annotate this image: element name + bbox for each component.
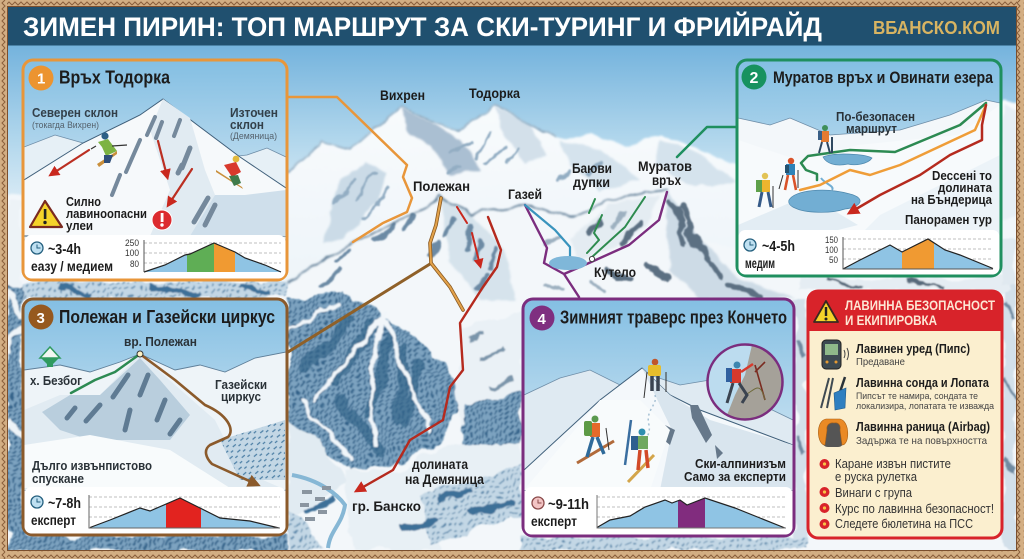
number badge 4: 4 <box>538 311 546 328</box>
duration: ~9-11h <box>548 496 589 513</box>
number badge 4 <box>530 306 554 330</box>
item: airbag: Задържа те на повърхността <box>856 435 987 447</box>
panel 4: winter traverse via Koncheto <box>523 299 794 536</box>
difficulty: медим <box>745 255 775 271</box>
route: Gazey blue <box>525 205 570 257</box>
label: long descent: Дълго извънпистово <box>32 458 152 473</box>
item: probe and shovel: Лавинна сонда и Лопата <box>856 375 990 390</box>
climbers <box>577 359 666 482</box>
peak marker <box>137 351 143 357</box>
safety header: ЛАВИННА БЕЗОПАСНОСТ <box>845 297 995 313</box>
item: probe and shovel: Пипсът те намира, сондата те <box>856 391 978 402</box>
inset: rock climber circle <box>708 344 785 420</box>
elevation chart 2 <box>825 235 993 269</box>
map labels: Баюви <box>572 160 612 176</box>
route lines panel 3 <box>71 354 256 484</box>
label: north slope: Северен склон <box>32 105 118 120</box>
label: Polezhan peak: вр. Полежан <box>124 334 197 349</box>
safety tips list: е руска рулетка <box>835 470 917 484</box>
map labels: връх <box>652 172 681 188</box>
label: avalanche gullies: Силно <box>66 194 101 209</box>
safety tips list: Следете бюлетина на ПСС <box>835 517 973 531</box>
map labels: на Демяница <box>405 471 484 487</box>
label: panoramic tour: Панорамен тур <box>905 212 992 227</box>
map labels: дупки <box>573 174 610 190</box>
panel 1: Vrah Todorka <box>23 60 287 280</box>
map labels: гр. Банско <box>352 498 421 514</box>
label: safer route <box>836 109 915 136</box>
icon: probe and shovel <box>821 377 846 410</box>
icon: clock <box>532 497 544 509</box>
site name: ВБАНСКО.КОМ <box>873 18 1000 38</box>
lakes <box>789 154 872 212</box>
duration: ~3-4h <box>48 241 81 258</box>
label: descent: долината <box>938 180 993 195</box>
label: Gazey cirque: Газейски <box>215 377 267 392</box>
label: ski alpinism: Само за експерти <box>684 469 786 484</box>
short avalanche arrows <box>457 207 480 265</box>
forest fan <box>8 238 1016 550</box>
label: Gazey cirque <box>215 377 267 404</box>
label: long descent: спускане <box>32 471 84 486</box>
stats strip 3 <box>24 487 286 534</box>
hikers <box>756 125 832 208</box>
difficulty: еазу / медием <box>31 258 113 274</box>
frame 3 <box>23 299 287 535</box>
icon: clock <box>31 242 43 254</box>
route lines on main map <box>288 97 736 490</box>
item: airbag: Лавинна раница (Airbag) <box>856 419 990 434</box>
map labels: Газей <box>508 186 542 202</box>
route: Polezhan orange <box>430 198 463 310</box>
number badge 2: 2 <box>750 70 758 87</box>
heading 3: Полежан и Газейски циркус <box>59 307 275 327</box>
label: descent <box>911 168 993 207</box>
safety tips list: Курс по лавинна безопасност! <box>835 502 994 516</box>
route: Demyanitsa red <box>358 217 501 490</box>
elevation chart 1: 100 <box>125 248 139 258</box>
safety header: И ЕКИПИРОВКА <box>845 312 937 328</box>
label: avalanche gullies: улеи <box>66 218 93 233</box>
label: ski alpinism <box>684 456 786 484</box>
frame 2 <box>737 60 1001 276</box>
route lines panel 2 <box>800 103 986 212</box>
number badge 2 <box>742 64 766 90</box>
icon: beacon <box>822 340 848 369</box>
header bar <box>8 7 1016 46</box>
label: ski alpinism: Ски-алпинизъм <box>695 456 786 471</box>
connector: panel 3 <box>288 264 430 352</box>
panel 3: Polezhan and Gazey cirque <box>23 299 287 535</box>
elevation chart 1: 80 <box>130 259 139 269</box>
icon: warning triangle <box>814 301 838 322</box>
safety header <box>808 291 1002 331</box>
number badge 3: 3 <box>36 310 45 327</box>
icon: clock <box>744 239 756 251</box>
icon: clock <box>31 496 43 508</box>
panel: avalanche safety and equipment <box>808 291 1002 538</box>
item: probe and shovel: локализира, лопатата те изважда <box>856 401 995 412</box>
front massif <box>0 190 1024 559</box>
item: airbag <box>818 419 990 447</box>
icon: airbag backpack <box>818 419 848 447</box>
elevation chart 2: 100 <box>825 245 838 255</box>
red slope arrows <box>52 141 192 204</box>
number badge 3 <box>28 304 54 330</box>
lake and hut point <box>549 256 595 270</box>
stats strip 4 <box>524 487 792 534</box>
icon: red alert <box>152 210 172 230</box>
duration: ~4-5h <box>762 238 795 255</box>
item: probe and shovel <box>821 375 995 412</box>
label: descent: на Бъндерица <box>911 192 993 207</box>
stats strip 1 <box>24 235 286 278</box>
frame 4 <box>523 299 794 536</box>
item: beacon: Лавинен уред (Пипс) <box>856 341 970 356</box>
difficulty: експерт <box>31 512 76 528</box>
number badge 1 <box>28 66 54 90</box>
label: Bezbog hut: х. Безбог <box>30 373 83 388</box>
label: avalanche gullies <box>66 194 147 233</box>
label: east slope: склон <box>230 117 264 132</box>
label: Gazey cirque: циркус <box>221 389 261 404</box>
difficulty: експерт <box>531 513 577 529</box>
safety tips list: Винаги с група <box>835 486 912 500</box>
river and village <box>292 475 345 548</box>
label: east slope <box>230 105 278 142</box>
map labels: Муратов <box>638 158 692 174</box>
label: north slope <box>32 105 118 131</box>
label: east slope: Източен <box>230 105 278 120</box>
label: avalanche gullies: лавиноопасни <box>66 206 147 221</box>
map labels: долината <box>412 456 468 472</box>
route: Kutelo purple <box>525 192 667 297</box>
label: safer route: маршрут <box>846 121 897 136</box>
elevation chart 1: 250 <box>125 238 139 248</box>
map labels: Тодорка <box>469 85 520 101</box>
number badge 1: 1 <box>37 70 45 88</box>
icon: warning triangle <box>30 201 62 227</box>
icon: skier east slope <box>216 156 243 189</box>
icon: hut Bezbog <box>40 347 60 367</box>
routes: green <box>587 197 645 257</box>
label: safer route: По-безопасен <box>836 109 915 124</box>
elevation chart 2: 50 <box>829 255 838 265</box>
frame 1 <box>23 60 287 280</box>
title: ЗИМЕН ПИРИН: ТОП МАРШРУТ ЗА СКИ-ТУРИНГ И ФРИЙРАЙД <box>23 11 822 42</box>
item: beacon: Предаване <box>856 356 905 368</box>
connector: panel 2 <box>677 127 736 157</box>
map labels: Кутело <box>594 264 636 280</box>
label: descent: Dессенi то <box>932 168 992 183</box>
map labels: Полежан <box>413 178 470 194</box>
safety tips list: Каране извън пистите <box>835 457 951 471</box>
rock streaks on upper massif <box>320 200 755 293</box>
icon: skier north slope <box>91 132 127 167</box>
elevation chart 1 <box>125 238 281 272</box>
item: beacon <box>822 340 970 369</box>
elevation chart 2: 150 <box>825 235 838 245</box>
heading 4: Зимният траверс през Кончето <box>560 308 787 328</box>
label: long descent <box>32 458 152 486</box>
label: north slope: (токагда Вихрен) <box>32 120 99 131</box>
skyline contours <box>288 105 666 282</box>
elevation chart 3 <box>89 495 280 528</box>
elevation chart 4 <box>597 495 786 528</box>
connector: panel 1 <box>288 97 412 242</box>
heading 1: Връх Тодорка <box>59 68 171 88</box>
map labels <box>352 85 692 514</box>
stats strip 2 <box>738 230 1000 274</box>
duration: ~7-8h <box>48 495 81 512</box>
panel 2: Muratov vrah <box>737 60 1001 276</box>
label: east slope: (Демяница) <box>230 131 277 142</box>
map labels: Вихрен <box>380 87 425 103</box>
safety tips list <box>820 457 994 531</box>
